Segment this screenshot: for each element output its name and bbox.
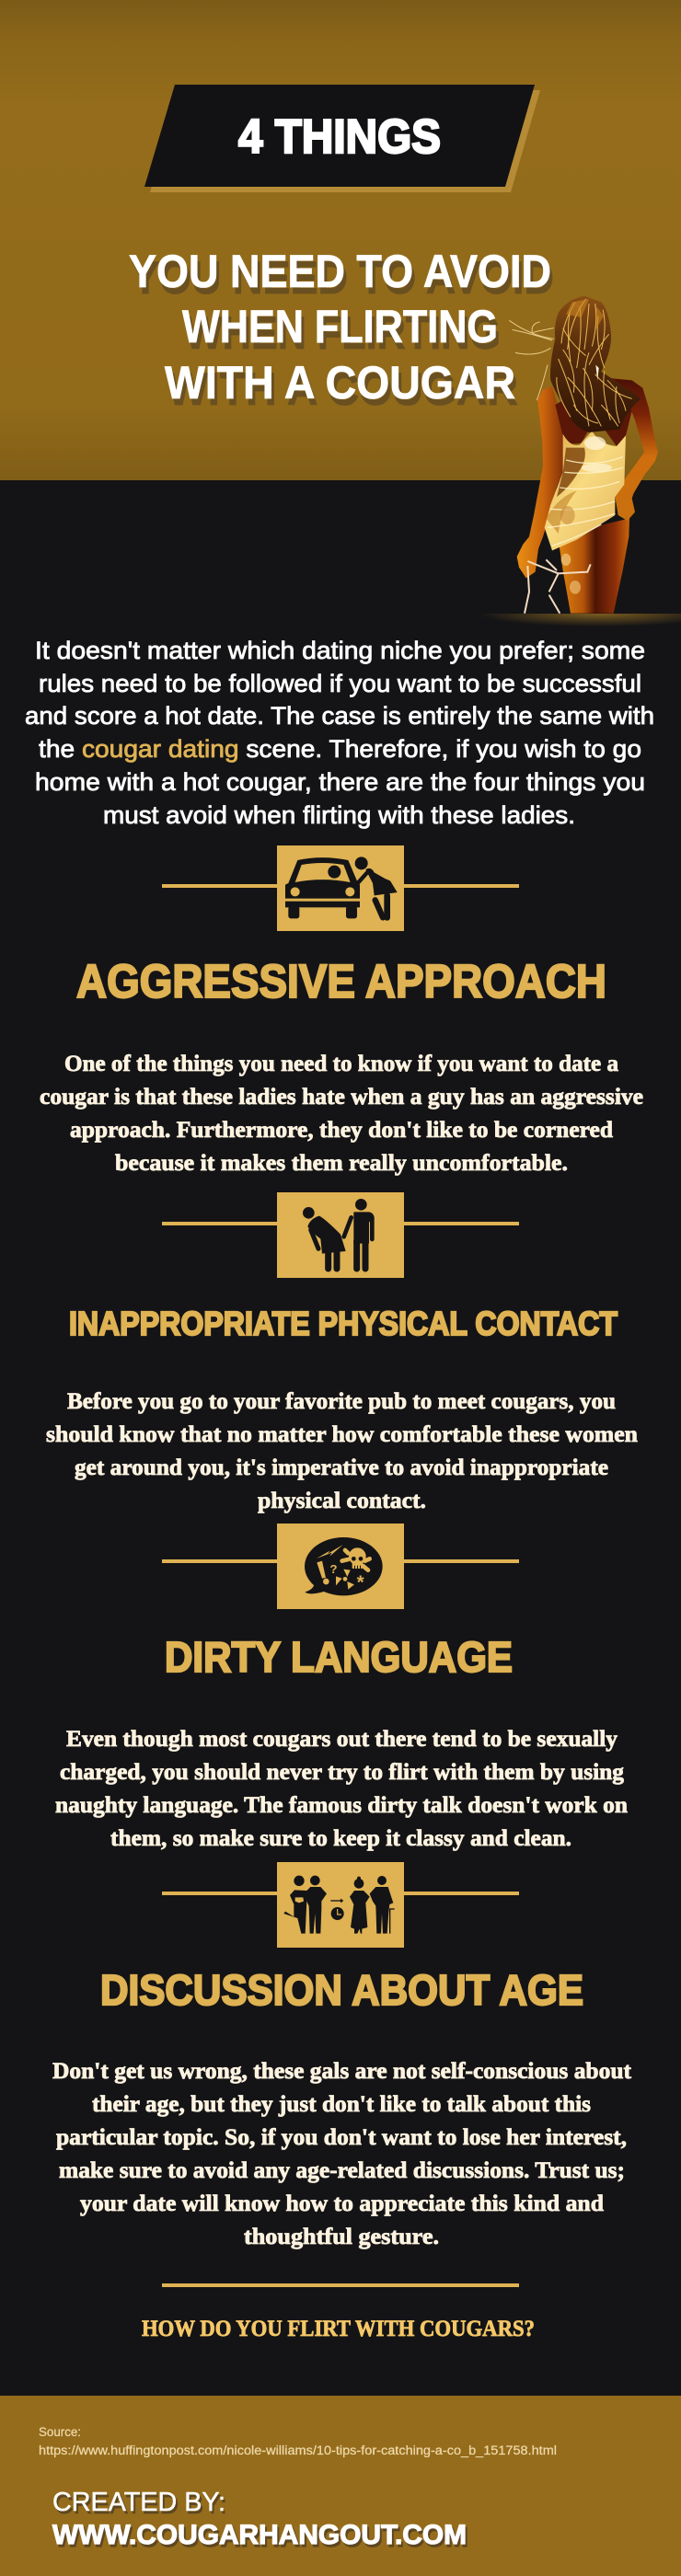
title: WITH A COUGAR (165, 357, 515, 408)
paragraph: aggressive approach: One of the things you need to know if you want to date a (64, 1052, 618, 1076)
paragraph: physical contact (46, 1389, 638, 1513)
icon divider: car approach (162, 845, 519, 931)
panel: gold header background (0, 0, 681, 480)
panel: footer (0, 2396, 681, 2576)
paragraph: aggressive approach: because it makes them really uncomfortable. (115, 1151, 568, 1176)
banner: 4 things: 4 THINGS (238, 110, 441, 164)
paragraph: dirty language: them, so make sure to keep it classy and clean. (110, 1826, 571, 1851)
source text: Source: (39, 2425, 81, 2439)
icon divider: couples ageing (162, 1862, 519, 1948)
paragraph: discussion about age (52, 2059, 632, 2249)
paragraph: physical contact: get around you, it's imperative to avoid inappropriate (75, 1455, 608, 1480)
heading: discussion about age: DISCUSSION ABOUT AGE (100, 1966, 583, 2014)
title: WHEN FLIRTING (182, 301, 498, 352)
paragraph: discussion about age: their age, but they just don't like to talk about this (92, 2092, 591, 2117)
title (129, 246, 551, 408)
intro text: must avoid when flirting with these ladies. (103, 801, 575, 829)
illustration: woman in gold dress (509, 296, 658, 614)
title: YOU NEED TO AVOID (129, 246, 551, 297)
paragraph: discussion about age: your date will know how to appreciate this kind and (80, 2191, 604, 2216)
intro text: and score a hot date. The case is entirely the same with (25, 702, 654, 730)
intro text: home with a hot cougar, there are the four things you (35, 768, 645, 796)
heading: aggressive approach: AGGRESSIVE APPROACH (76, 955, 606, 1007)
credit: WWW.COUGARHANGOUT.COM (52, 2520, 467, 2550)
banner: 4 things (144, 85, 540, 192)
icon divider: dirty language (162, 1524, 519, 1609)
source text (39, 2425, 557, 2457)
intro text: rules need to be followed if you want to be successful (39, 670, 641, 697)
icon divider: physical contact (162, 1192, 519, 1278)
paragraph: discussion about age: particular topic. So, if you don't want to lose her interest, (56, 2125, 627, 2150)
paragraph: dirty language (55, 1727, 628, 1851)
credit (52, 2488, 467, 2550)
paragraph: physical contact: physical contact. (258, 1489, 426, 1513)
call to action question: HOW DO YOU FLIRT WITH COUGARS? (142, 2317, 535, 2341)
floor glow (479, 614, 681, 639)
paragraph: discussion about age: make sure to avoid any age-related discussions. Trust us; (59, 2158, 625, 2183)
intro text: It doesn't matter which dating niche you prefer; some (35, 637, 645, 664)
paragraph: discussion about age: Don't get us wrong, these gals are not self-conscious about (52, 2059, 632, 2084)
paragraph: aggressive approach: approach. Furthermore, they don't like to be cornered (70, 1118, 613, 1143)
heading: dirty language: DIRTY LANGUAGE (165, 1633, 513, 1681)
heading: inappropriate physical contact: INAPPROPRIATE PHYSICAL CONTACT (69, 1305, 618, 1342)
credit: CREATED BY: (52, 2488, 225, 2517)
paragraph: discussion about age: thoughtful gesture. (244, 2225, 439, 2249)
paragraph: dirty language: Even though most cougars out there tend to be sexually (66, 1727, 618, 1752)
intro text: the cougar dating scene. Therefore, if you wish to go (39, 735, 641, 763)
icon divider: dirty language: ? (329, 1562, 337, 1576)
icon divider: dirty language: * (357, 1572, 365, 1593)
paragraph: aggressive approach (40, 1052, 643, 1176)
paragraph: physical contact: Before you go to your favorite pub to meet cougars, you (67, 1389, 616, 1414)
paragraph: dirty language: naughty language. The famous dirty talk doesn't work on (55, 1793, 628, 1818)
divider line (162, 2283, 519, 2287)
paragraph: physical contact: should know that no matter how comfortable these women (46, 1422, 638, 1447)
source text: https://www.huffingtonpost.com/nicole-williams/10-tips-for-catching-a-co_b_151758.html (39, 2444, 557, 2457)
paragraph: aggressive approach: cougar is that these ladies hate when a guy has an aggressive (40, 1085, 643, 1110)
intro text (25, 637, 654, 829)
paragraph: dirty language: charged, you should never try to flirt with them by using (60, 1760, 625, 1785)
